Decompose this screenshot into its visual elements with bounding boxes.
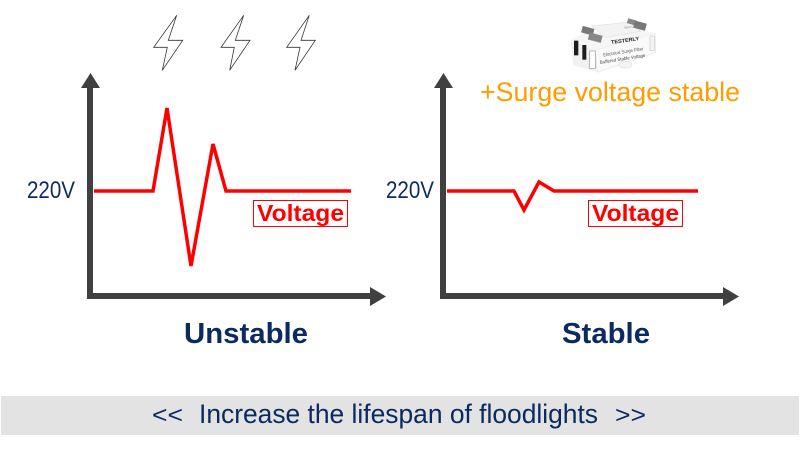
- chart: stable voltage: [386, 73, 739, 350]
- icon: lightning bolts: [154, 15, 315, 70]
- icon: surge filter device: TESTERLY: [611, 36, 640, 46]
- banner: lifespan message: <<: [152, 402, 183, 429]
- label: 220V: 220V: [386, 177, 434, 204]
- legend: voltage: Voltage: [257, 200, 344, 226]
- chart: unstable voltage: [27, 73, 386, 350]
- banner: lifespan message: >>: [615, 402, 646, 429]
- heading: unstable: Unstable: [184, 318, 308, 350]
- banner: lifespan message: [1, 396, 799, 435]
- heading: stable: Stable: [562, 318, 650, 350]
- axes: stable chart: [434, 73, 739, 306]
- callout: surge voltage stable: +Surge voltage stable: [480, 77, 740, 107]
- icon: surge filter device: Input Output: [624, 24, 641, 30]
- axes: unstable chart: [81, 73, 386, 306]
- label: 220V: 220V: [27, 177, 75, 204]
- legend: voltage: Voltage: [592, 200, 679, 226]
- banner: lifespan message: Increase the lifespan of floodlights: [199, 399, 598, 429]
- line: unstable voltage trace: [94, 108, 351, 266]
- icon: surge filter device: [571, 18, 656, 72]
- line: stable voltage trace: [447, 182, 698, 210]
- icon: surge filter device: Electrical Surge Filter: [603, 46, 644, 57]
- icon: surge filter device: Buffered Stable Voltage: [600, 53, 646, 65]
